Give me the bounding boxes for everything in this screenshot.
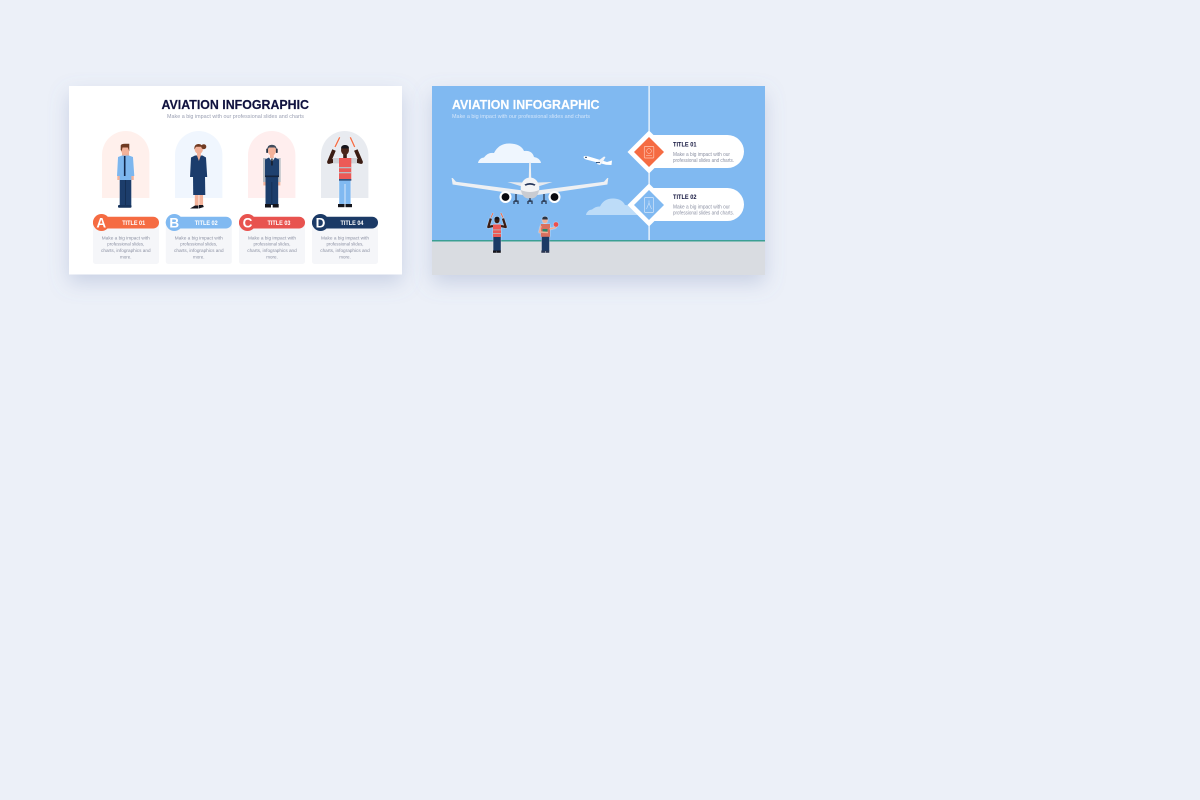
description xyxy=(312,224,378,264)
arch background xyxy=(102,131,149,198)
heading: TITLE 01 xyxy=(673,142,697,149)
letter pill xyxy=(93,214,159,231)
small airplane xyxy=(584,156,612,165)
pill xyxy=(649,135,744,168)
panel: aviation staff slide xyxy=(69,86,402,274)
title: AVIATION INFOGRAPHIC xyxy=(452,97,600,112)
letter pill: C xyxy=(243,215,253,230)
letter pill: B xyxy=(169,215,179,230)
letter pill: TITLE 03 xyxy=(268,220,291,227)
description: professional slides, xyxy=(254,242,290,248)
arch background xyxy=(321,131,368,198)
card D: marshaller xyxy=(312,131,378,264)
description xyxy=(93,224,159,264)
description: professional slides, xyxy=(326,242,364,248)
description: professional slides, xyxy=(180,242,217,248)
heading: TITLE 02 xyxy=(673,194,697,201)
letter pill: D xyxy=(316,215,326,230)
description: Make a big impact with xyxy=(321,235,369,241)
description xyxy=(239,224,305,264)
callout: title 02: professional slides and charts. xyxy=(673,211,734,217)
description: Make a big impact with xyxy=(248,235,296,241)
subtitle: Make a big impact with our professional slides and charts xyxy=(167,114,304,120)
cloud: small xyxy=(586,198,642,215)
subtitle: Make a big impact with our professional slides and charts xyxy=(452,114,590,120)
diamond icon xyxy=(628,130,670,174)
landing gear xyxy=(514,194,546,204)
ground xyxy=(432,241,765,275)
description: charts, infographics and xyxy=(174,248,224,254)
figure: marshaller xyxy=(329,137,361,207)
body: Make a big impact with our xyxy=(673,204,730,210)
cloud: large xyxy=(478,143,541,163)
description: more. xyxy=(266,254,278,260)
body: Make a big impact with our xyxy=(673,152,730,158)
stabilizers xyxy=(508,182,522,186)
letter pill xyxy=(166,214,232,231)
callout: title 01: professional slides and charts. xyxy=(673,158,734,164)
description: more. xyxy=(339,254,351,260)
description: charts, infographics and xyxy=(247,248,297,254)
letter pill: A xyxy=(96,215,106,230)
description: professional slides, xyxy=(107,242,144,248)
wings xyxy=(452,178,523,195)
figure: pilot xyxy=(117,144,134,208)
diamond icon xyxy=(628,184,670,226)
card C: ground crew xyxy=(239,131,305,264)
large airplane xyxy=(452,162,608,204)
arch background xyxy=(248,131,295,198)
description: more. xyxy=(120,254,132,260)
panel: airport scene slide xyxy=(432,86,765,275)
description xyxy=(166,224,232,264)
description: Make a big impact with xyxy=(175,235,223,241)
letter pill: TITLE 01 xyxy=(122,220,146,227)
figure: ground crew on apron xyxy=(540,216,558,253)
engines xyxy=(500,191,512,203)
letter pill: TITLE 02 xyxy=(195,220,218,227)
arch background xyxy=(175,131,222,198)
tail fin xyxy=(529,162,531,178)
title: AVIATION INFOGRAPHIC xyxy=(162,97,309,112)
letter pill xyxy=(239,214,305,231)
figure: ground crew xyxy=(263,145,281,208)
fuselage xyxy=(521,178,539,198)
description: charts, infographics and xyxy=(320,248,370,254)
description: Make a big impact with xyxy=(102,235,150,241)
letter pill xyxy=(312,214,378,231)
description: more. xyxy=(193,254,205,260)
letter pill: TITLE 04 xyxy=(340,220,364,227)
figure: flight attendant xyxy=(190,144,207,208)
card A: pilot xyxy=(93,131,159,264)
pill xyxy=(649,188,744,221)
timeline line xyxy=(648,86,650,240)
callout: title 01 xyxy=(628,130,744,174)
callout: title 02 xyxy=(628,184,744,226)
description: charts, infographics and xyxy=(101,248,151,254)
figure: marshaller on apron xyxy=(488,213,506,253)
card B: flight attendant xyxy=(166,131,232,264)
